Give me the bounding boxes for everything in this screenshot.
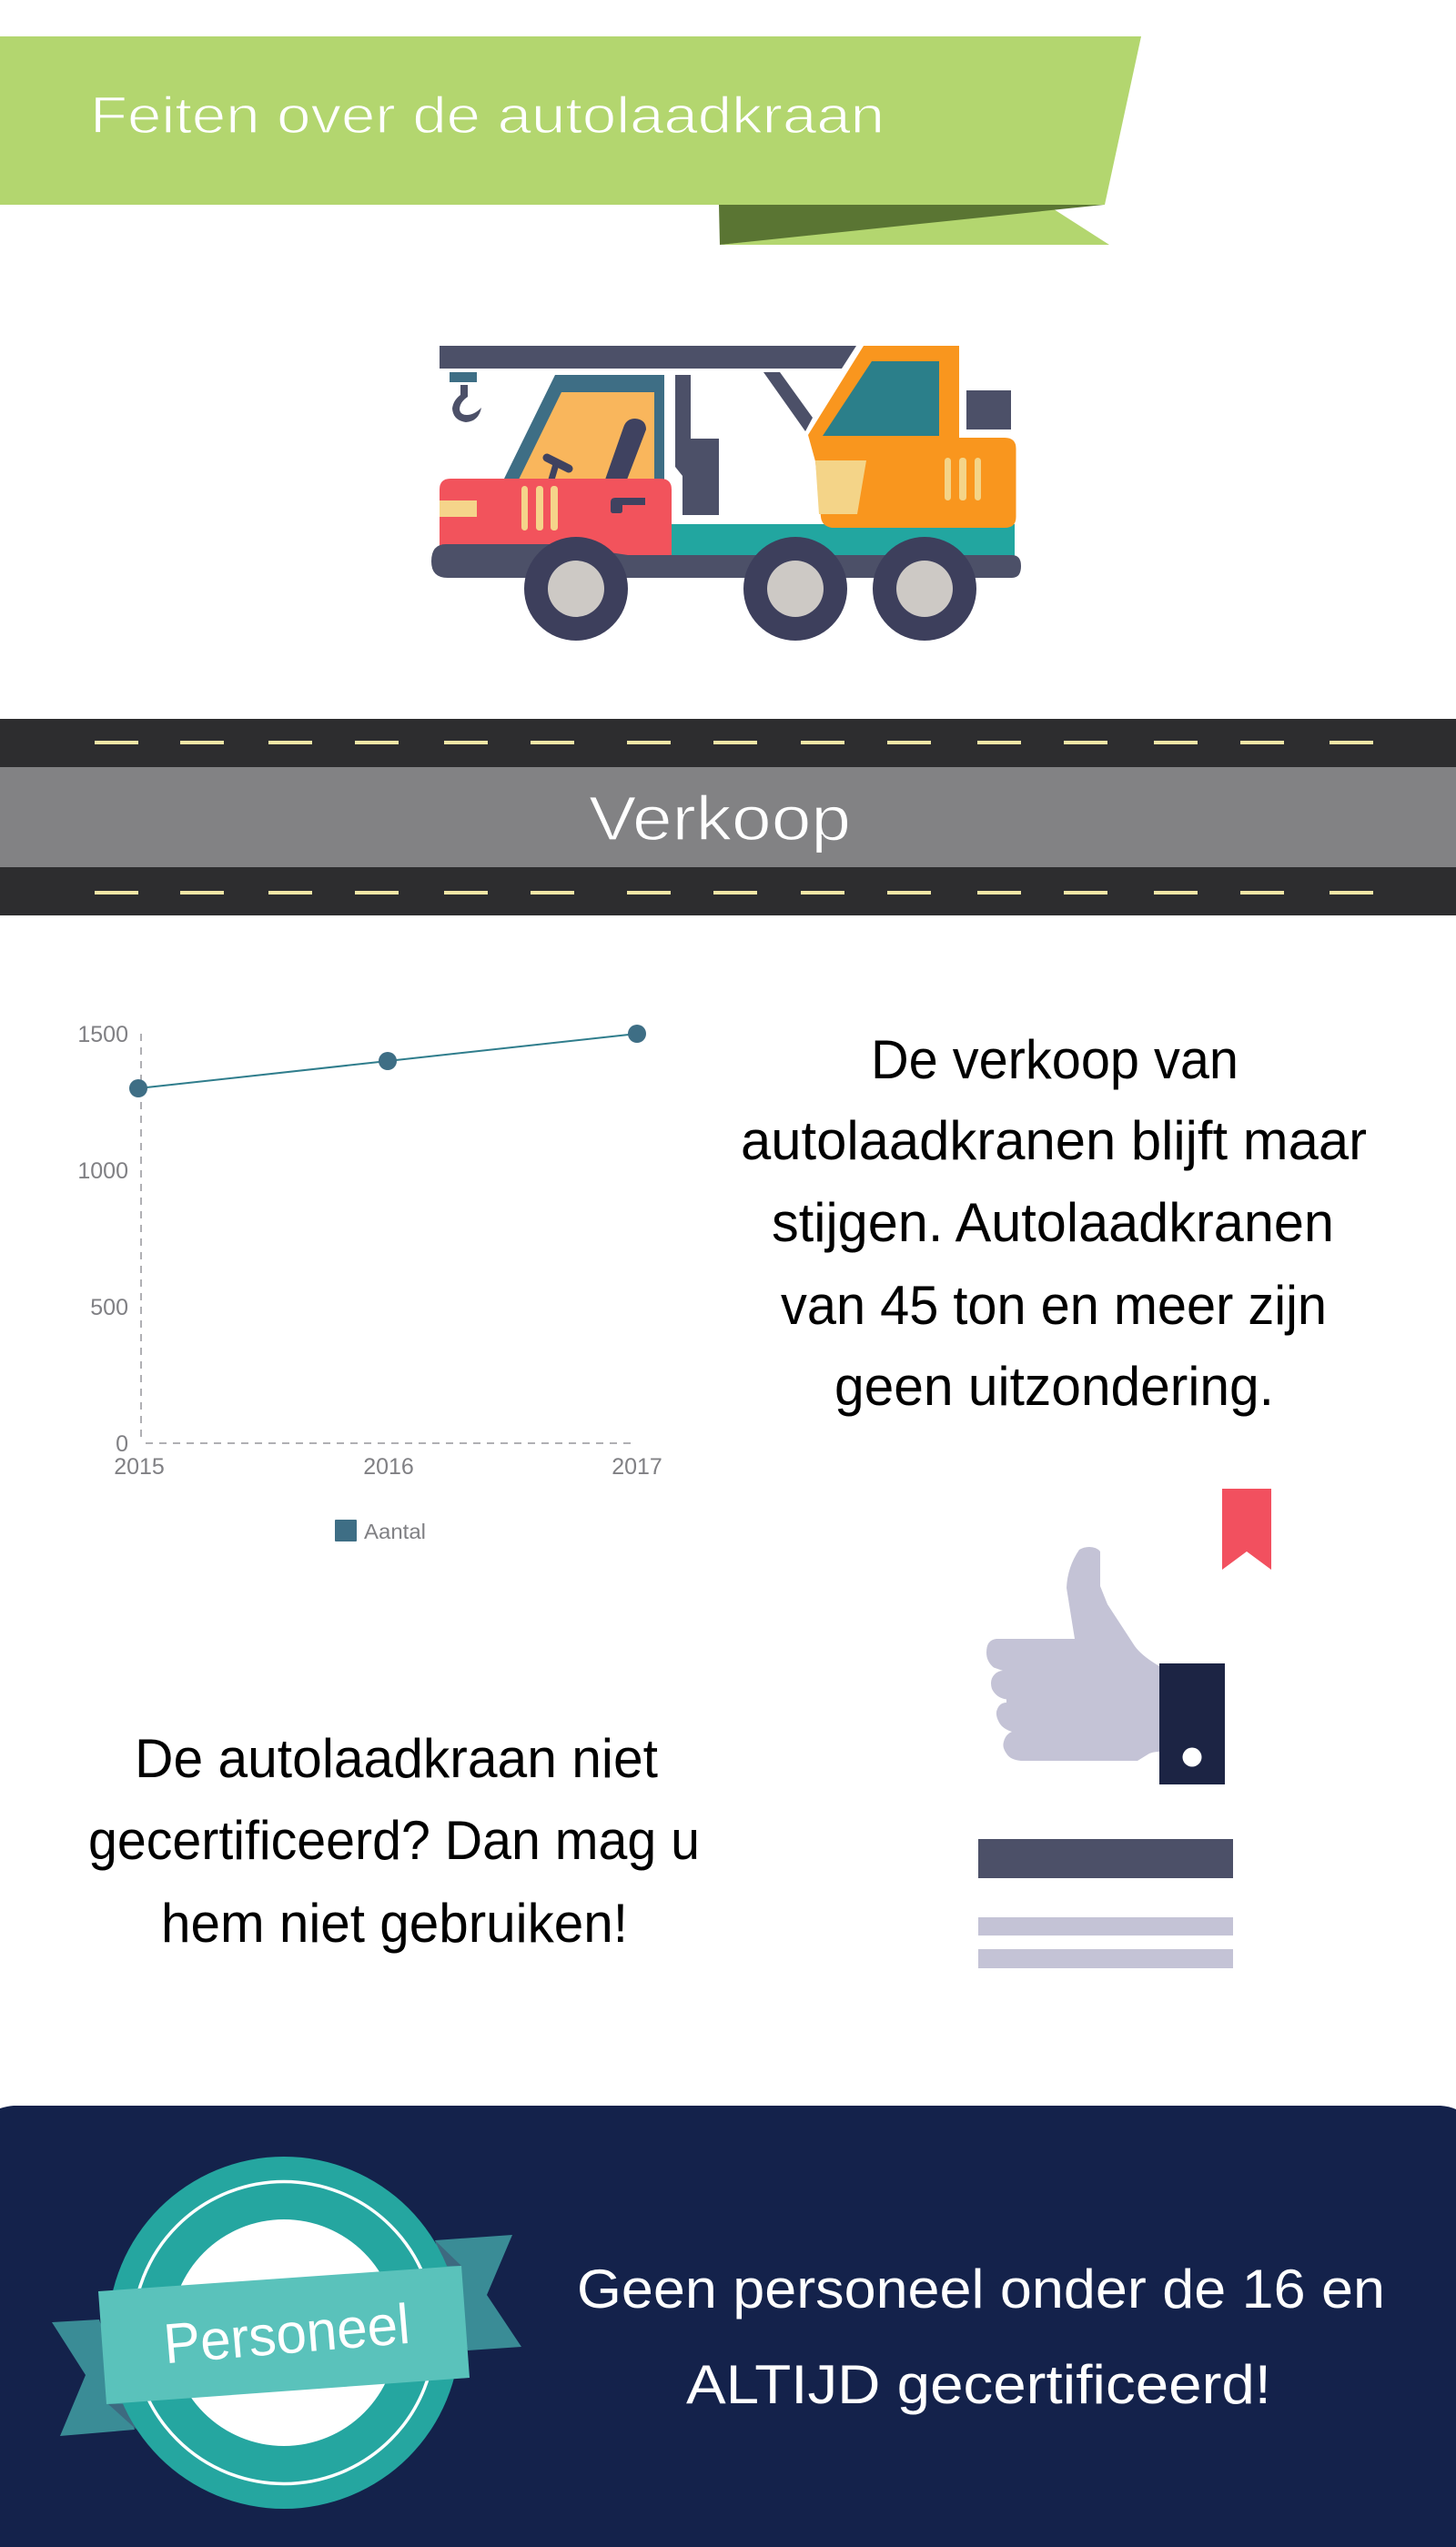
text block: sales xyxy=(741,1029,1367,1417)
text block: sales: autolaadkranen blijft maar xyxy=(741,1110,1367,1171)
text block: personnel xyxy=(577,2259,1385,2415)
line chart: 2017 xyxy=(612,1454,662,1480)
text block: certification: hem niet gebruiken! xyxy=(161,1893,628,1954)
badge: personeel xyxy=(52,2157,521,2509)
section heading: Verkoop xyxy=(589,783,851,854)
road band: Verkoop xyxy=(0,719,1456,915)
text bars xyxy=(978,1839,1233,1968)
text block: sales: stijgen. Autolaadkranen xyxy=(772,1192,1334,1253)
title: Feiten over de autolaadkraan xyxy=(90,86,885,145)
header banner xyxy=(0,36,1141,245)
text block: personnel: Geen personeel onder de 16 en xyxy=(577,2259,1385,2320)
icon: crane truck xyxy=(431,346,1021,641)
line chart: 500 xyxy=(90,1295,128,1320)
text block: sales: De verkoop van xyxy=(871,1029,1239,1090)
line chart: 1500 xyxy=(77,1022,128,1047)
chart legend xyxy=(335,1520,426,1543)
text block: personnel: ALTIJD gecertificeerd! xyxy=(686,2354,1271,2415)
text block: certification: gecertificeerd? Dan mag u xyxy=(88,1810,700,1871)
line chart xyxy=(77,1022,662,1543)
chart legend: Aantal xyxy=(364,1520,426,1543)
badge label: Personeel xyxy=(161,2293,412,2376)
icon: thumbs up card xyxy=(978,1489,1271,1968)
text block: sales: geen uitzondering. xyxy=(834,1356,1274,1417)
line chart: 2015 xyxy=(114,1454,165,1480)
text block: certification xyxy=(88,1728,700,1954)
text block: certification: De autolaadkraan niet xyxy=(135,1728,658,1789)
icon: bookmark xyxy=(1222,1489,1271,1570)
line chart: 2016 xyxy=(363,1454,414,1480)
panel: personeel xyxy=(0,2106,1456,2547)
line chart: 0 xyxy=(116,1431,128,1457)
icon: cuff xyxy=(1159,1663,1225,1784)
icon: thumbs up hand xyxy=(986,1547,1159,1761)
text block: sales: van 45 ton en meer zijn xyxy=(781,1275,1327,1336)
line chart: 1000 xyxy=(77,1158,128,1184)
